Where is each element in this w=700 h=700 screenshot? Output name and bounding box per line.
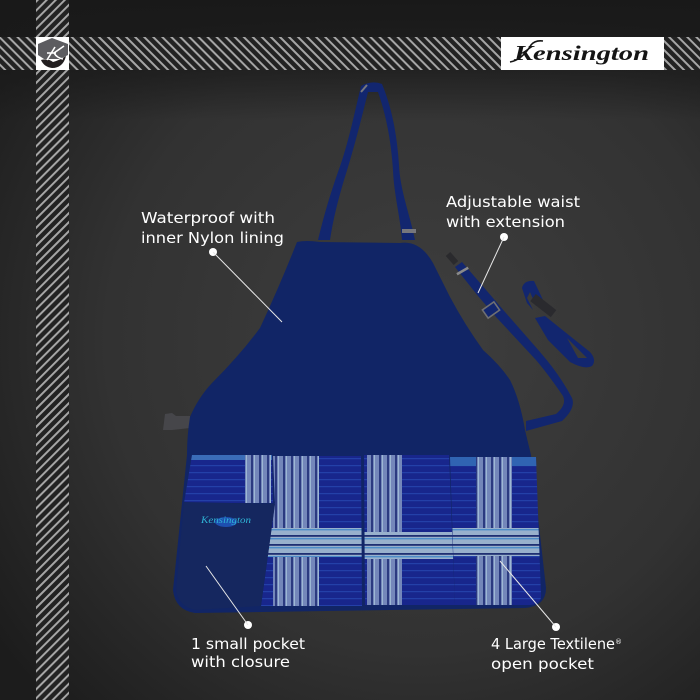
callout: waterproof lining: [141, 209, 284, 322]
waist strap left: [448, 254, 573, 431]
callout: waterproof lining: inner Nylon lining: [141, 229, 284, 247]
callout: large pockets: open pocket: [491, 655, 594, 673]
pocket 2 plaid: [261, 456, 362, 606]
apron body: [173, 241, 546, 613]
waist strap loop: [522, 281, 594, 367]
apron: [163, 82, 594, 613]
pocket 4 plaid: [450, 457, 541, 605]
small pocket: [176, 502, 275, 610]
neck strap buckle: [361, 85, 416, 233]
callout: large pockets: 4 Large Textilene: [491, 635, 615, 653]
small pocket: Kensington: [200, 515, 252, 525]
callout: large pockets: [491, 561, 622, 673]
callout: waterproof lining: Waterproof with: [141, 209, 275, 227]
callout: small pocket: 1 small pocket: [191, 635, 305, 653]
logo: Kensington wordmark: Kensington: [513, 41, 649, 65]
callout: large pockets: ®: [615, 638, 622, 646]
callout: adjustable waist: [446, 193, 580, 293]
callout: adjustable waist: with extension: [446, 213, 565, 231]
logo: Kensington wordmark: [501, 37, 664, 70]
callout: adjustable waist: Adjustable waist: [446, 193, 580, 211]
callout: small pocket: with closure: [191, 653, 290, 671]
callout: small pocket: [191, 566, 305, 671]
horizontal hatched band: [0, 37, 700, 70]
side buckle: [163, 413, 190, 430]
vertical hatched band: [36, 0, 69, 700]
neck strap: [318, 82, 415, 240]
icon: K shield logo: [36, 37, 69, 70]
pocket 1 plaid: [184, 455, 273, 503]
pocket 3 plaid: [364, 455, 455, 605]
